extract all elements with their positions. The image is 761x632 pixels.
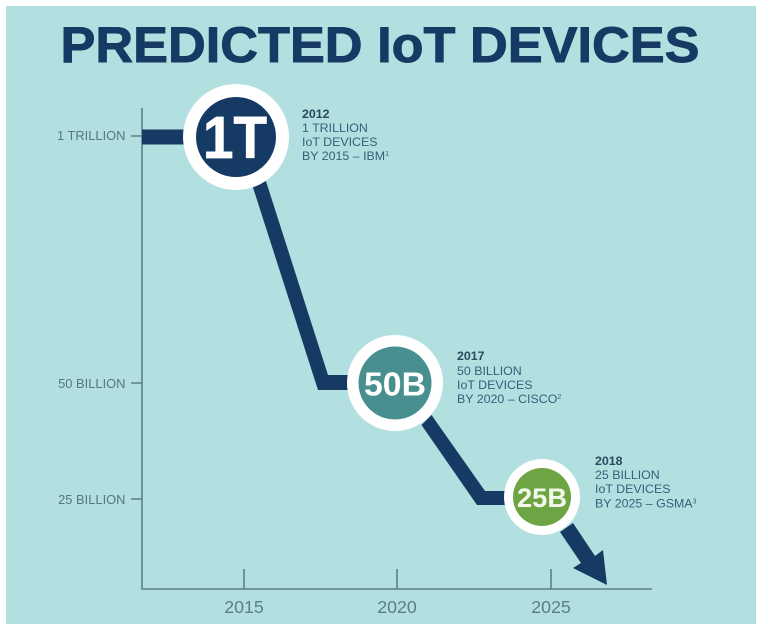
annotation: 2018: 2018 <box>595 454 623 468</box>
annotation: 2017: 50 BILLION <box>457 364 522 378</box>
arrow <box>560 523 607 585</box>
circle: 25B <box>504 459 580 535</box>
annotation: 2012: BY 2015 – IBM <box>302 149 385 163</box>
annotation: 2018: BY 2025 – GSMA <box>595 496 693 510</box>
annotation: 2017: 2017 <box>457 349 485 363</box>
annotation: 2017 <box>457 349 561 406</box>
circle: 1T: 1T <box>203 105 267 171</box>
y axis labels: 25 BILLION <box>58 492 126 507</box>
annotation: 2012: 2012 <box>302 107 330 121</box>
y axis labels: 1 TRILLION <box>57 128 126 143</box>
x axis labels <box>224 597 571 617</box>
annotation: 2017: IoT DEVICES <box>457 378 533 392</box>
x axis labels: 2015 <box>224 597 264 617</box>
circle: 50B <box>347 335 443 431</box>
annotation: 2018: 25 BILLION <box>595 468 660 482</box>
annotation: 2012: IoT DEVICES <box>302 135 378 149</box>
y axis labels <box>57 128 126 507</box>
annotation: 2012 <box>302 107 389 163</box>
annotation: 2018: IoT DEVICES <box>595 482 671 496</box>
trend line <box>142 130 520 505</box>
circle: 50B: 50B <box>364 366 426 402</box>
annotation: 2018: 3 <box>693 498 697 506</box>
annotation: 2012: 1 <box>385 151 389 158</box>
y axis labels: 50 BILLION <box>58 376 126 391</box>
annotation: 2017: BY 2020 – CISCO <box>457 392 557 406</box>
annotation: 2017: 2 <box>557 394 561 401</box>
x axis labels: 2020 <box>377 597 417 617</box>
title: PREDICTED IoT DEVICES <box>60 17 700 73</box>
annotation: 2018 <box>595 454 697 510</box>
x axis labels: 2025 <box>531 597 571 617</box>
circle: 25B: 25B <box>517 483 567 513</box>
circle: 1T <box>183 84 289 190</box>
chart axes <box>131 108 652 589</box>
annotation: 2012: 1 TRILLION <box>302 121 368 135</box>
